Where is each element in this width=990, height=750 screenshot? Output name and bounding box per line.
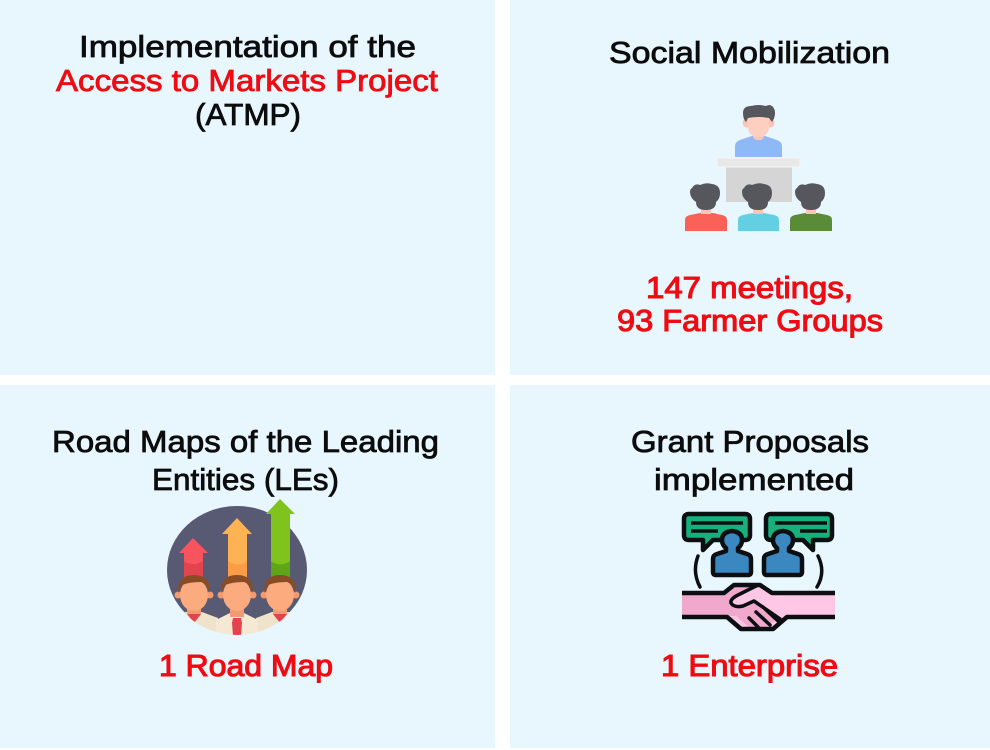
heading: grant proposals (631, 424, 869, 497)
heading: road maps: Road Maps of the Leading (52, 424, 439, 459)
heading: road maps (52, 424, 439, 497)
stat: meetings and farmer groups (617, 270, 883, 338)
heading: project name: Access to Markets Project (56, 63, 438, 98)
heading: project name: (ATMP) (195, 97, 301, 132)
stat: meetings and farmer groups: 93 Farmer Groups (617, 303, 883, 338)
heading: grant proposals: Grant Proposals (631, 424, 869, 459)
heading: road maps: Entities (LEs) (152, 462, 339, 497)
icon: rising arrows and three people (166, 499, 308, 640)
panel: social mobilization (510, 0, 990, 375)
heading: project name (56, 29, 438, 132)
panel: project title (0, 0, 495, 375)
heading: social mobilization: Social Mobilization (609, 35, 890, 70)
icon: presenter and audience (685, 105, 832, 231)
panel: grant proposals (510, 385, 990, 748)
stat: road map count: 1 Road Map (159, 648, 333, 683)
icon: two people and handshake (682, 514, 835, 629)
stat: enterprise count: 1 Enterprise (661, 648, 838, 683)
heading: project name: Implementation of the (79, 29, 416, 64)
panel: road maps (0, 385, 495, 748)
stat: meetings and farmer groups: 147 meetings, (646, 270, 853, 305)
heading: grant proposals: implemented (654, 462, 854, 497)
